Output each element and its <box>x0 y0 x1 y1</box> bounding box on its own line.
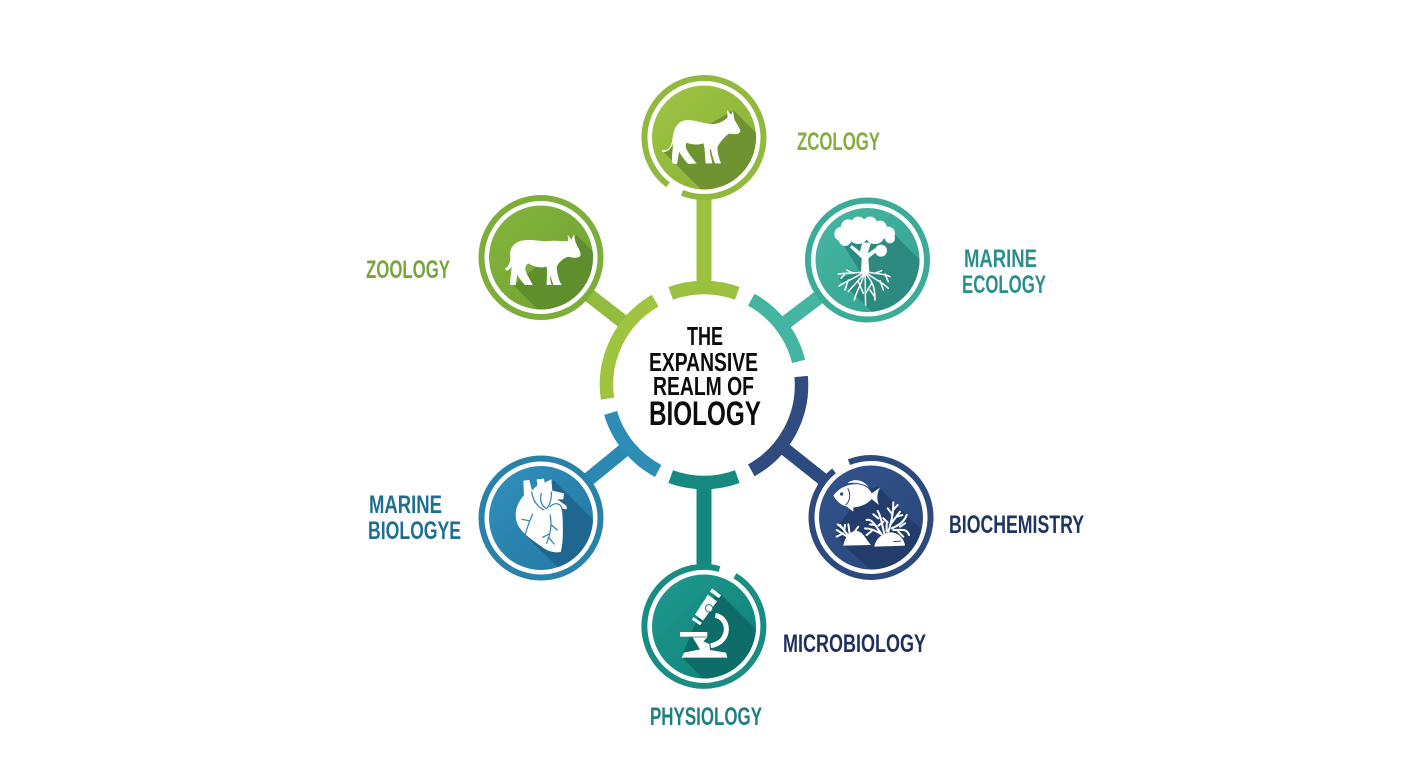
center title: REALM OF <box>653 373 754 401</box>
branch: upper-right marine ecology <box>748 198 930 363</box>
radial biology diagram <box>366 75 1084 725</box>
icon: fish and coral <box>833 480 909 547</box>
label: marine biologye: BIOLOGYE <box>368 517 461 545</box>
connector: upper right <box>781 296 820 326</box>
branch: upper-left zoology <box>482 198 655 399</box>
disc: upper left <box>489 206 593 310</box>
ring: upper left <box>482 198 600 317</box>
label: zcology: ZCOLOGY <box>797 128 880 156</box>
center title: THE <box>687 323 723 351</box>
label: microbiology: MICROBIOLOGY <box>783 630 926 658</box>
disc: lower left <box>489 466 593 570</box>
icon: heart <box>516 479 567 552</box>
icon: tree with roots <box>834 217 895 305</box>
label: biochemistry: BIOCHEMISTRY <box>949 511 1084 539</box>
hub arc: top <box>671 288 737 293</box>
label: marine biologye: MARINE <box>369 491 442 519</box>
connector: top <box>696 197 712 288</box>
connector: lower right <box>780 445 824 480</box>
branch: lower-left marine biology <box>482 413 658 600</box>
disc: upper right <box>816 208 920 312</box>
label: marine ecology <box>962 245 1046 299</box>
label: marine ecology: ECOLOGY <box>962 271 1046 299</box>
label: marine ecology: MARINE <box>964 245 1037 273</box>
icon: animal silhouette upper left <box>505 234 581 285</box>
icon: microscope <box>680 590 727 658</box>
hub arc: lower left <box>611 413 658 471</box>
long shadow: lower left <box>524 480 593 567</box>
ring: top <box>644 78 763 197</box>
long shadow: bottom <box>682 592 756 678</box>
hub arc: upper left <box>607 301 655 399</box>
branch: bottom physiology <box>641 470 766 689</box>
center title <box>649 323 761 433</box>
icon: animal silhouette top <box>662 110 740 164</box>
label: physiology: PHYSIOLOGY <box>650 703 762 731</box>
label: marine biologye <box>368 491 461 545</box>
ring: bottom <box>644 567 763 686</box>
ring: lower right <box>812 458 931 577</box>
hub arc: bottom <box>671 477 737 482</box>
center title: BIOLOGY <box>649 395 761 433</box>
hub arc: upper right <box>751 300 799 361</box>
ring: lower left <box>482 458 600 578</box>
long shadow: lower right <box>834 486 922 570</box>
disc: bottom <box>652 574 756 678</box>
connector: upper left <box>588 294 628 325</box>
long shadow: upper right <box>838 235 920 312</box>
connector: lower left <box>588 446 629 480</box>
ring: upper right <box>808 200 927 320</box>
hub arc: lower right <box>751 376 802 470</box>
label: zoology: ZOOLOGY <box>366 256 450 284</box>
disc: top <box>652 86 756 190</box>
center title: EXPANSIVE <box>649 349 758 377</box>
long shadow: top <box>664 110 756 190</box>
branch: lower-right biochemistry <box>748 376 934 580</box>
long shadow: upper left <box>514 235 593 310</box>
disc: lower right <box>819 466 923 570</box>
connector: bottom <box>696 482 712 568</box>
branch: top zoology <box>641 75 766 300</box>
